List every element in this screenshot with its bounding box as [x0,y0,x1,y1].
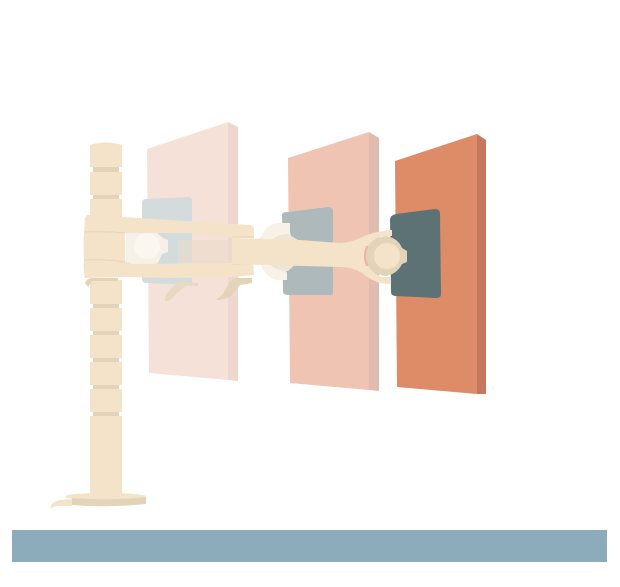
upper arm link [84,215,254,238]
pole segments [90,142,122,494]
monitor: faded left position [142,122,252,381]
shadow under lower arm [85,278,118,287]
horizontal arm with fork [232,230,392,284]
monitor: foreground right position [390,134,486,394]
hub seam lines [84,232,254,264]
ghost joint: middle position [259,223,298,280]
pivot ring on fork [364,236,407,276]
monitor: middle position [282,132,379,391]
monitor arm [84,142,392,494]
pivot hub [84,232,125,261]
lower arm link [84,260,254,278]
base clamp [50,493,146,508]
ghost joint: left position [126,232,232,266]
desk bar [12,530,607,562]
